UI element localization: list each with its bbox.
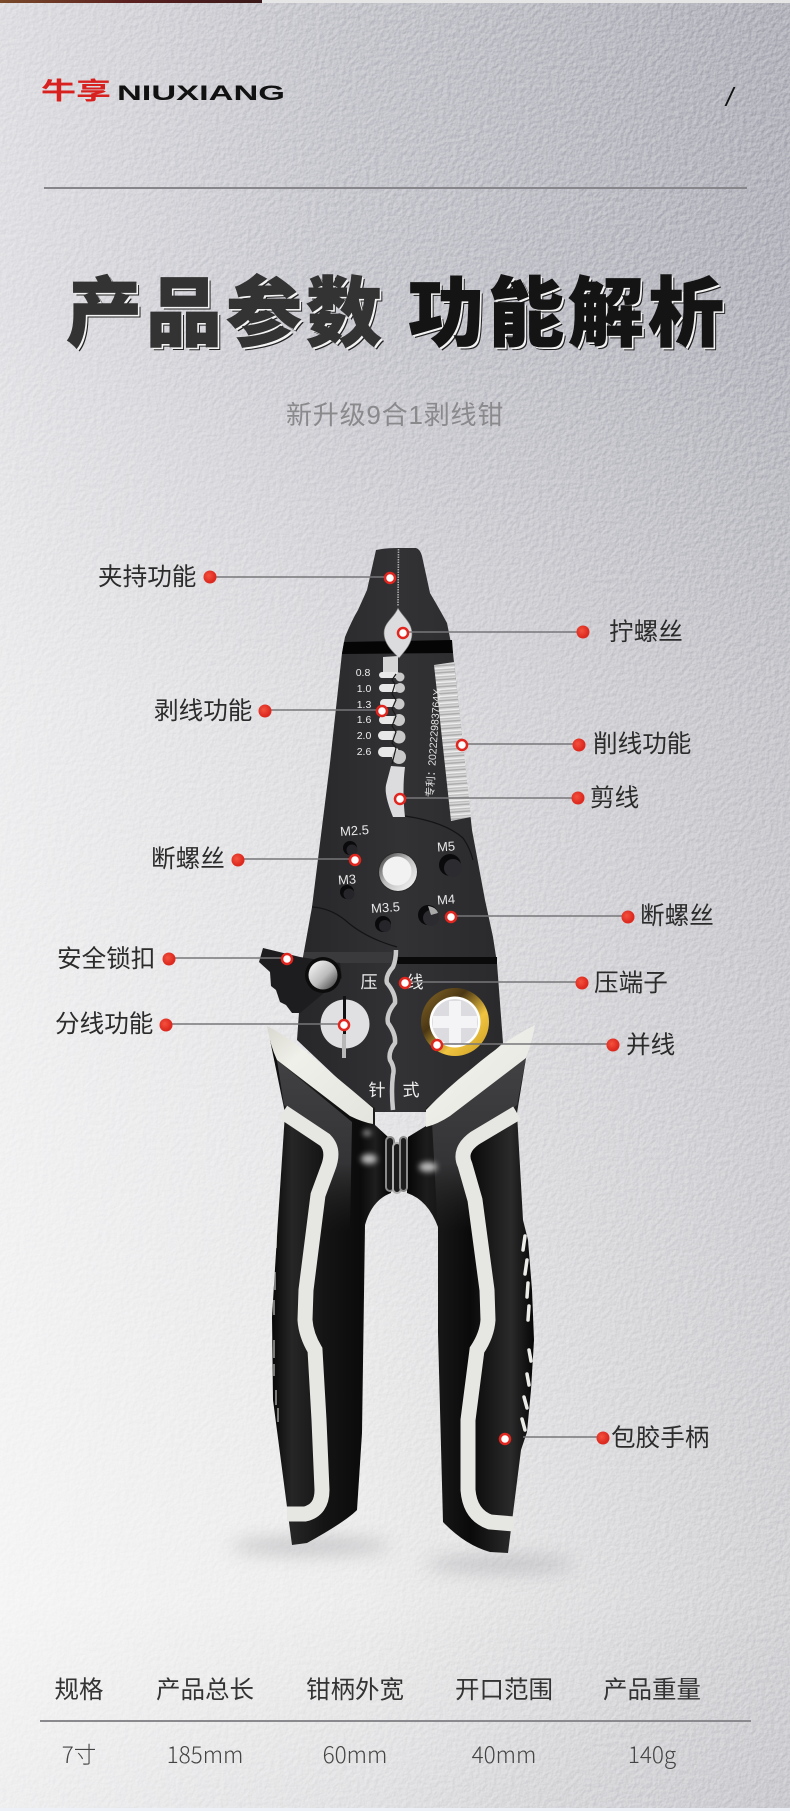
callout: 拧螺丝: 拧螺丝 xyxy=(609,618,683,646)
strip gauge block xyxy=(383,656,398,672)
gauge numbers: 2.0 xyxy=(357,730,371,742)
slash mark: / xyxy=(724,82,736,112)
center rivet xyxy=(378,852,418,892)
safety lock xyxy=(259,948,342,1013)
spec values: 7寸 xyxy=(62,1738,96,1770)
callout: 包胶手柄 xyxy=(500,1424,709,1452)
callout: 压端子: 压端子 xyxy=(594,969,668,997)
screw size labels: M2.5 xyxy=(340,822,369,839)
crimp labels: 线 xyxy=(406,973,424,992)
illustration: wire stripper pliers xyxy=(259,548,535,1553)
lower lighter band xyxy=(303,952,392,963)
spec values: 140g xyxy=(628,1738,676,1770)
callout: 并线: 并线 xyxy=(626,1031,675,1059)
wire cutter circle xyxy=(320,996,370,1058)
left upper grip texture xyxy=(277,1060,352,1232)
callout: 安全锁扣 xyxy=(57,945,292,973)
jaw serration xyxy=(397,549,400,606)
spec headers: 开口范围 xyxy=(455,1676,553,1704)
cutter slot xyxy=(386,766,405,817)
spec values: 40mm xyxy=(472,1738,536,1770)
ground shadows xyxy=(230,1538,575,1571)
screw size labels: M4 xyxy=(437,891,456,908)
brand logo: 牛享 xyxy=(41,78,111,105)
spec values: 185mm xyxy=(167,1738,243,1770)
callout: 削线功能: 削线功能 xyxy=(593,730,691,758)
brand logo: NIUXIANG xyxy=(117,82,285,105)
screw holes xyxy=(340,841,462,932)
gauge numbers xyxy=(356,667,371,758)
callout: 剪线: 剪线 xyxy=(590,784,639,812)
subtitle: 新升级9合1剥线钳 xyxy=(286,400,504,430)
left collar xyxy=(267,1026,373,1124)
gauge numbers: 2.6 xyxy=(357,746,371,758)
callout: 安全锁扣: 安全锁扣 xyxy=(57,945,155,973)
spec values xyxy=(62,1738,676,1770)
title: 产品参数 xyxy=(66,272,386,357)
callout: 夹持功能: 夹持功能 xyxy=(98,563,196,591)
callout: 断螺丝 right xyxy=(446,902,714,930)
callout: 并线 xyxy=(432,1031,675,1059)
screw size labels: M3.5 xyxy=(371,899,400,916)
lower black band xyxy=(397,957,497,964)
right collar xyxy=(426,1025,535,1127)
bottom strip xyxy=(0,1808,790,1811)
crimp labels xyxy=(360,973,424,1100)
spec headers: 规格 xyxy=(54,1676,104,1704)
screw size labels: M3 xyxy=(338,871,357,888)
callout: 剥线功能 xyxy=(154,697,387,725)
patent text: 专利：202222983764X xyxy=(423,688,444,798)
callout: 断螺丝 right: 断螺丝 xyxy=(640,902,714,930)
callout: 压端子 xyxy=(400,969,668,997)
gauge numbers: 1.6 xyxy=(357,714,371,726)
top strip xyxy=(0,0,790,3)
black band xyxy=(342,640,453,654)
left grip ribs xyxy=(274,1232,278,1422)
spec headers: 钳柄外宽 xyxy=(306,1676,404,1704)
callout: 夹持功能 xyxy=(98,563,395,591)
serrated shaver blade xyxy=(434,662,471,821)
callout: 断螺丝 left xyxy=(151,845,360,873)
callout: 包胶手柄: 包胶手柄 xyxy=(611,1424,709,1452)
pivot highlights xyxy=(361,1130,437,1172)
title: 功能解析 xyxy=(408,272,728,357)
crimp labels: 针 xyxy=(368,1081,386,1100)
screw eye opening xyxy=(384,608,412,658)
strip gauge holes xyxy=(378,672,406,764)
right handle xyxy=(407,1040,534,1553)
callout: 分线功能: 分线功能 xyxy=(55,1010,153,1038)
spec table xyxy=(40,1676,751,1770)
callout: 削线功能 xyxy=(457,730,691,758)
header divider xyxy=(44,187,747,189)
spring xyxy=(386,1137,407,1193)
plate seams xyxy=(312,816,473,947)
callout: 剪线 xyxy=(395,784,639,812)
center wavy gap xyxy=(387,950,396,1110)
callout: 剥线功能: 剥线功能 xyxy=(154,697,252,725)
right grip ribs xyxy=(522,1236,531,1430)
left handle xyxy=(270,1040,391,1545)
brand logo xyxy=(41,78,285,105)
spec values: 60mm xyxy=(323,1738,387,1770)
callout: 拧螺丝 xyxy=(398,618,683,646)
crimp labels: 式 xyxy=(402,1081,420,1100)
gold bolt xyxy=(421,988,489,1056)
left white stripe xyxy=(283,1112,331,1514)
title xyxy=(66,272,728,357)
right upper grip texture xyxy=(432,1058,526,1232)
spec headers: 产品总长 xyxy=(156,1676,254,1704)
gauge numbers: 1.3 xyxy=(357,699,371,711)
gauge numbers: 1.0 xyxy=(357,683,371,695)
gauge numbers: 0.8 xyxy=(356,667,370,679)
callout: 断螺丝 left: 断螺丝 xyxy=(151,845,225,873)
screw size labels: M5 xyxy=(437,838,456,855)
spec headers: 产品重量 xyxy=(603,1676,701,1704)
metal head xyxy=(297,548,503,1112)
right white stripe xyxy=(463,1113,517,1524)
screw size labels xyxy=(338,822,456,916)
spec headers xyxy=(54,1676,701,1704)
callout: 分线功能 xyxy=(55,1010,349,1038)
crimp labels: 压 xyxy=(360,973,378,992)
